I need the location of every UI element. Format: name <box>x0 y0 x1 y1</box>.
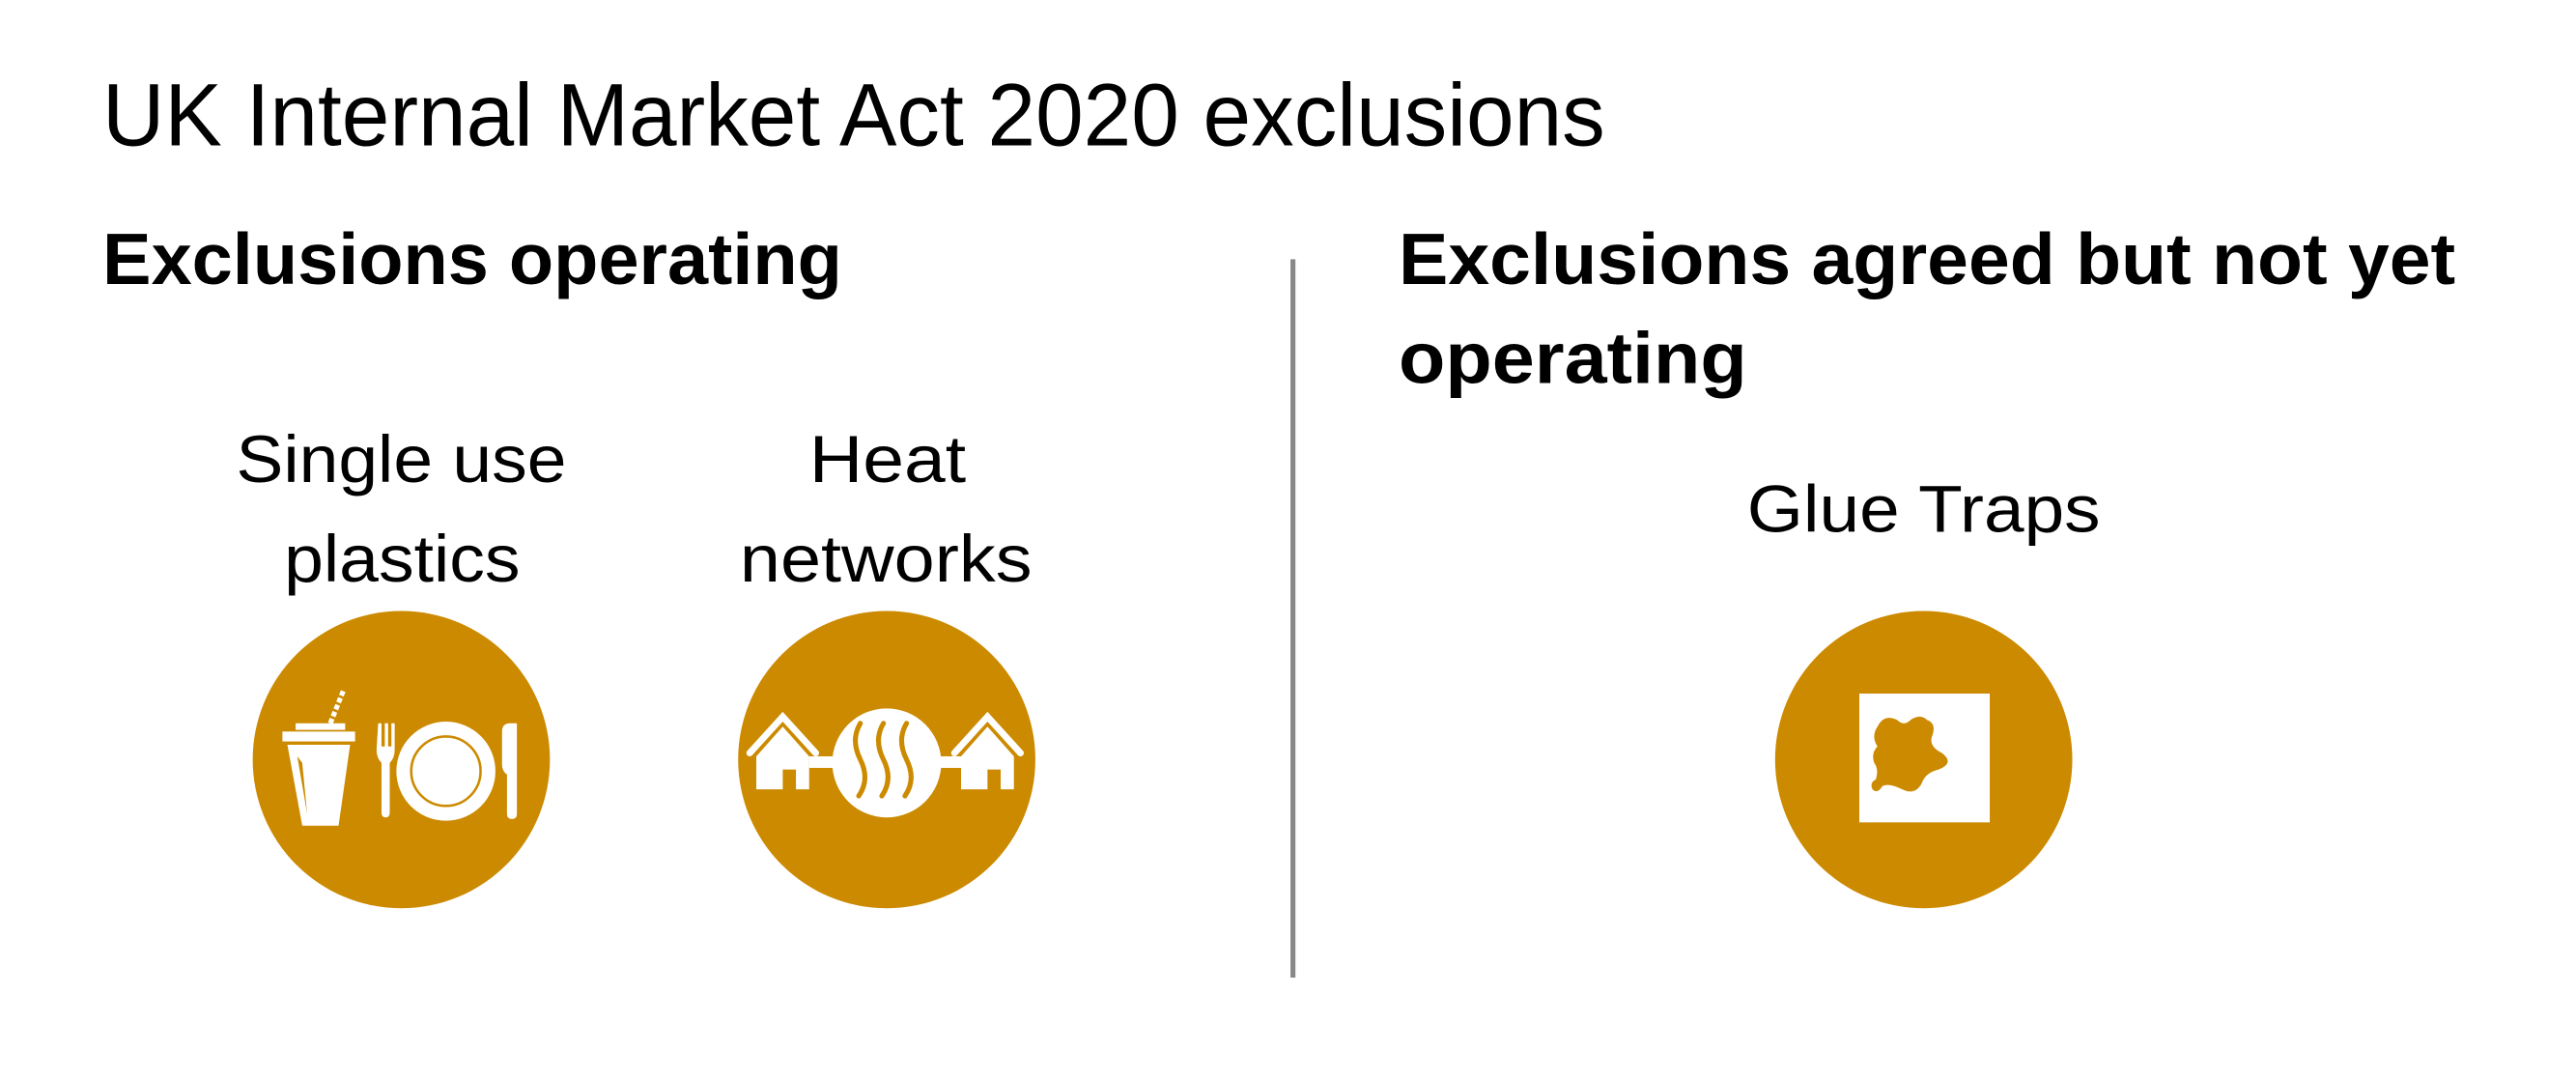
label: single use plastics <box>237 423 566 596</box>
straw <box>330 691 344 724</box>
icon: glue traps <box>1775 611 2073 908</box>
central heat source <box>833 708 942 817</box>
label: heat networks: Heat <box>809 423 966 497</box>
icon: single use plastics <box>253 611 550 908</box>
label: heat networks <box>740 423 1033 596</box>
fork <box>377 724 395 817</box>
heading: exclusions agreed but not yet operating <box>1399 218 2455 399</box>
left house <box>750 717 816 753</box>
label: heat networks: networks <box>740 523 1033 596</box>
divider <box>1290 259 1295 978</box>
knife <box>502 724 517 819</box>
heading: exclusions agreed but not yet operating: operating <box>1399 318 1747 399</box>
cup <box>296 724 345 730</box>
icon: heat networks <box>738 611 1035 908</box>
label: single use plastics: Single use <box>237 423 566 497</box>
heading: exclusions operating: Exclusions operating <box>102 218 842 299</box>
title: UK Internal Market Act 2020 exclusions <box>102 64 1605 164</box>
heading: exclusions agreed but not yet operating: Exclusions agreed but not yet <box>1399 218 2455 299</box>
plate <box>396 722 495 821</box>
label: single use plastics: plastics <box>284 523 521 596</box>
label: glue traps: Glue Traps <box>1747 472 2101 546</box>
right house <box>938 756 964 768</box>
